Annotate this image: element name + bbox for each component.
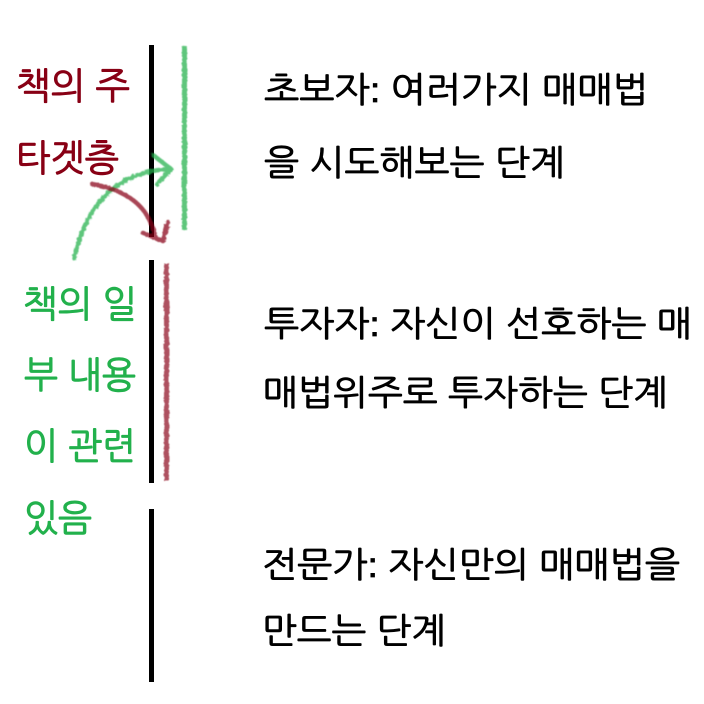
heading: main target of the book: [16, 66, 130, 179]
arrow: red: [92, 184, 168, 241]
text block: beginner stage: [264, 71, 648, 183]
text block: expert stage: 만드는 단계: [262, 612, 446, 651]
heading: partly related content: [23, 284, 137, 539]
heading: partly related content: 부 내용: [24, 355, 136, 396]
text block: investor stage: 매법위주로 투자하는 단계: [263, 374, 668, 413]
heading: partly related content: 책의 일: [23, 284, 137, 325]
timeline stage bar: beginner: [149, 45, 154, 237]
heading: main target of the book: 책의 주: [16, 66, 130, 107]
heading: main target of the book: 타겟층: [16, 138, 119, 179]
heading: partly related content: 이 관련: [24, 426, 136, 467]
text block: investor stage: [263, 305, 692, 413]
text block: investor stage: 투자자: 자신이 선호하는 매: [264, 305, 692, 344]
arrow: green: [74, 155, 171, 258]
text block: beginner stage: 초보자: 여러가지 매매법: [264, 71, 648, 110]
green bracket line: [182, 46, 187, 230]
text block: expert stage: [262, 546, 680, 651]
red bracket line: [164, 263, 169, 481]
text block: beginner stage: 을 시도해보는 단계: [264, 144, 565, 183]
heading: partly related content: 있음: [24, 498, 92, 539]
text block: expert stage: 전문가: 자신만의 매매법을: [262, 546, 680, 585]
timeline stage bar: investor: [149, 260, 154, 483]
timeline stage bar: expert: [149, 509, 154, 682]
